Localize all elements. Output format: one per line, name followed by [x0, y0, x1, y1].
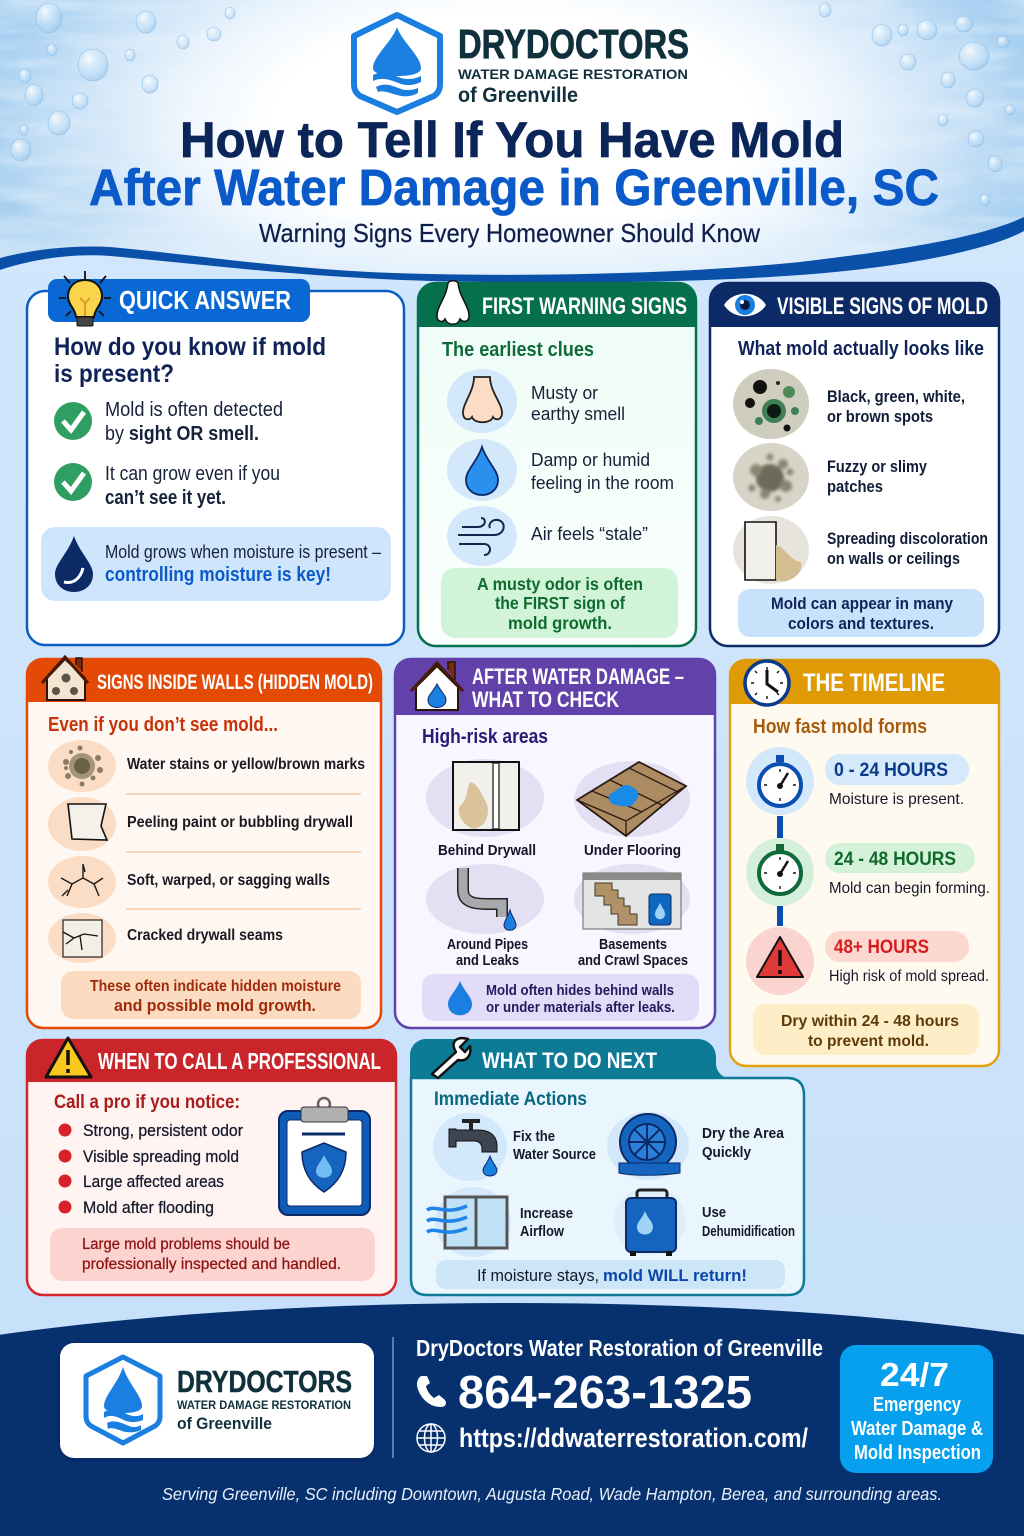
question heading: is present? — [54, 360, 174, 388]
checklist item: can grow unseen — [54, 463, 280, 509]
hidden moisture callout: These often indicate hidden moisture — [90, 978, 341, 995]
decorative wave — [0, 217, 1024, 283]
step: 48 plus hours: High risk of mold spread. — [829, 968, 989, 985]
area: around pipes: and Leaks — [456, 953, 519, 969]
bullet list: Strong, persistent odor — [83, 1122, 243, 1140]
checklist item: sight or smell: by sight OR smell. — [105, 423, 259, 445]
step: 0 to 24 hours: Moisture is present. — [829, 791, 964, 808]
bullet list: Mold after flooding — [83, 1199, 214, 1217]
panel: what to do next: WHAT TO DO NEXT — [482, 1048, 657, 1073]
item: damp feeling: feeling in the room — [531, 472, 674, 493]
title: How to Tell If You Have Mold — [180, 112, 844, 168]
footer logo card: of Greenville — [177, 1414, 272, 1433]
panel: quick answer: QUICK ANSWER — [119, 285, 291, 315]
item: spreading discoloration: on walls or ceilings — [827, 550, 960, 568]
visible signs header — [709, 282, 1000, 327]
header water background — [0, 0, 1024, 285]
item: damp feeling — [447, 439, 674, 501]
footer — [0, 1303, 1024, 1536]
logo: DryDoctors header — [354, 15, 689, 112]
professional inspection callout: professionally inspected and handled. — [82, 1256, 341, 1273]
panel: the timeline — [729, 659, 1000, 1066]
musty odor callout: A musty odor is often — [477, 574, 643, 594]
panel: after water damage — [394, 658, 716, 1028]
professional inspection callout — [50, 1228, 375, 1281]
24/7 badge: 24/7 — [880, 1356, 949, 1393]
professional inspection callout: Large mold problems should be — [82, 1236, 290, 1253]
step: 0 to 24 hours: 0 - 24 HOURS — [834, 760, 948, 781]
checklist item: can grow unseen: It can grow even if you — [105, 463, 280, 485]
action: increase airflow: Airflow — [520, 1224, 565, 1240]
footer logo card: DRYDOCTORS — [177, 1364, 352, 1399]
panel: when to call a professional: Call a pro if you notice: — [54, 1092, 240, 1113]
icon: house with drop — [411, 662, 463, 710]
dry within callout: to prevent mold. — [808, 1033, 929, 1050]
area: basements — [574, 864, 690, 969]
colors and textures callout: colors and textures. — [788, 615, 934, 633]
step: 0 to 24 hours — [746, 747, 969, 815]
panel: what to do next: Immediate Actions — [434, 1089, 587, 1110]
icon: light bulb — [59, 271, 111, 326]
step: 24 to 48 hours: Mold can begin forming. — [829, 880, 990, 897]
mold hides callout: or under materials after leaks. — [486, 1000, 675, 1016]
action: dehumidification: Use — [702, 1205, 726, 1221]
area: under flooring — [574, 761, 690, 859]
item: cracked seams: Cracked drywall seams — [127, 927, 283, 944]
item: warped walls — [48, 856, 330, 908]
action: dry the area: Dry the Area — [702, 1126, 785, 1142]
item: musty smell — [447, 369, 625, 433]
service area line: Serving Greenville, SC including Downtown, Augusta Road, Wade Hampton, Berea, and surrounding areas. — [162, 1484, 942, 1504]
item: stale air: Air feels “stale” — [531, 523, 648, 544]
dry within callout — [753, 1004, 979, 1055]
area: basements: Basements — [599, 937, 667, 953]
panel: what to do next — [410, 1038, 804, 1295]
question heading: How do you know if mold — [54, 333, 326, 361]
icon: clock — [745, 661, 789, 705]
24/7 badge: Emergency — [873, 1394, 962, 1416]
mold will return callout: If moisture stays, — [477, 1266, 599, 1285]
24/7 badge: Mold Inspection — [854, 1442, 981, 1464]
action: fix water source: Fix the — [513, 1129, 555, 1145]
item: colored spots: or brown spots — [827, 408, 933, 426]
item: water stains — [48, 740, 365, 792]
area: around pipes — [426, 864, 544, 969]
bullet list — [58, 1122, 243, 1217]
panel: after water damage: High-risk areas — [422, 726, 548, 748]
panel: signs inside walls: SIGNS INSIDE WALLS (HIDDEN MOLD) — [97, 671, 373, 694]
panel: signs inside walls — [26, 657, 382, 1028]
musty odor callout: mold growth. — [508, 613, 612, 633]
step: 48 plus hours: 48+ HOURS — [834, 937, 929, 958]
icon: white nose — [437, 281, 469, 324]
item: cracked seams — [48, 913, 283, 963]
action: increase airflow: Increase — [520, 1206, 573, 1222]
area: behind drywall — [426, 759, 544, 859]
panel: when to call a professional: WHEN TO CALL A PROFESSIONAL — [98, 1048, 381, 1074]
hidden moisture callout — [61, 971, 361, 1019]
item: fuzzy patches: Fuzzy or slimy — [827, 458, 928, 476]
subtitle: Warning Signs Every Homeowner Should Know — [259, 218, 760, 248]
panel: after water damage: WHAT TO CHECK — [472, 687, 620, 712]
panel: visible signs of mold: What mold actually looks like — [738, 338, 984, 360]
icon: moldy house — [42, 657, 88, 700]
action: fix water source: Water Source — [513, 1147, 596, 1163]
action: dry the area: Quickly — [702, 1145, 751, 1161]
area: basements: and Crawl Spaces — [578, 953, 688, 969]
panel: first warning signs: FIRST WARNING SIGNS — [482, 293, 687, 320]
professional header — [26, 1039, 397, 1082]
company name: DryDoctors Water Restoration of Greenville — [416, 1335, 823, 1361]
dry within callout: Dry within 24 - 48 hours — [781, 1013, 959, 1030]
action: increase airflow — [427, 1187, 573, 1257]
footer logo card: WATER DAMAGE RESTORATION — [177, 1400, 351, 1412]
action: dehumidification: Dehumidification — [702, 1224, 795, 1240]
panel: first warning signs — [417, 281, 697, 646]
what to do next header — [410, 1039, 730, 1082]
timeline header — [729, 659, 1000, 704]
hidden moisture callout: and possible mold growth. — [114, 997, 316, 1015]
checklist item: sight or smell: Mold is often detected — [105, 399, 283, 421]
item: damp feeling: Damp or humid — [531, 449, 650, 470]
step: 24 to 48 hours: 24 - 48 HOURS — [834, 849, 956, 870]
item: peeling paint — [48, 797, 353, 851]
mold hides callout: Mold often hides behind walls — [486, 983, 674, 999]
panel: after water damage: AFTER WATER DAMAGE – — [472, 664, 684, 689]
website: https://ddwaterrestoration.com/ — [459, 1423, 808, 1453]
step: 48 plus hours — [746, 927, 989, 995]
signs inside walls header — [26, 658, 382, 702]
item: spreading discoloration: Spreading discoloration — [827, 530, 988, 548]
title: After Water Damage in Greenville, SC — [89, 159, 939, 216]
colors and textures callout: Mold can appear in many — [771, 595, 954, 613]
after water damage header — [394, 658, 716, 715]
item: colored spots: Black, green, white, — [827, 388, 965, 406]
item: peeling paint: Peeling paint or bubbling drywall — [127, 814, 353, 831]
action: fix water source — [433, 1113, 596, 1181]
panel: signs inside walls: Even if you don’t see mold... — [48, 714, 278, 736]
item: warped walls: Soft, warped, or sagging walls — [127, 872, 330, 889]
area: under flooring: Under Flooring — [584, 843, 681, 859]
icon: clipboard with shield — [279, 1098, 370, 1215]
area: around pipes: Around Pipes — [447, 937, 528, 953]
mold will return callout: mold WILL return! — [603, 1266, 747, 1285]
action: dry the area — [607, 1112, 785, 1180]
question heading — [54, 333, 326, 388]
musty odor callout: the FIRST sign of — [495, 593, 625, 613]
moisture callout: controlling moisture is key! — [105, 564, 331, 586]
panel: the timeline: How fast mold forms — [753, 716, 927, 738]
item: musty smell: Musty or — [531, 382, 598, 403]
checklist item: can grow unseen: can’t see it yet. — [105, 487, 226, 509]
panel: when to call a professional — [26, 1038, 397, 1295]
moisture callout: Mold grows when moisture is present – — [105, 542, 381, 562]
item: fuzzy patches: patches — [827, 478, 883, 496]
checklist item: sight or smell — [54, 399, 283, 445]
mold hides callout — [422, 974, 699, 1021]
logo: DryDoctors header: of Greenville — [458, 84, 578, 107]
item: fuzzy patches — [733, 443, 928, 511]
action: dehumidification — [614, 1187, 795, 1256]
panel: the timeline: THE TIMELINE — [803, 669, 945, 697]
step: 24 to 48 hours — [746, 838, 990, 906]
colors and textures callout — [738, 589, 984, 637]
item: musty smell: earthy smell — [531, 403, 625, 424]
item: stale air — [447, 506, 648, 566]
bullet list: Visible spreading mold — [83, 1148, 239, 1166]
icon: warning triangle — [46, 1038, 91, 1077]
quick answer header tab — [48, 279, 310, 322]
footer logo card — [60, 1343, 374, 1458]
panel: first warning signs: The earliest clues — [442, 339, 594, 361]
24/7 badge: Water Damage & — [851, 1418, 983, 1440]
first warning signs header — [417, 282, 697, 327]
logo: DryDoctors header: WATER DAMAGE RESTORATION — [458, 66, 688, 82]
item: spreading discoloration — [733, 516, 988, 584]
item: colored spots — [733, 369, 965, 439]
panel: visible signs of mold — [709, 282, 1000, 646]
moisture callout — [41, 527, 391, 601]
panel: quick answer — [27, 271, 404, 645]
phone number: 864-263-1325 — [458, 1366, 752, 1418]
logo: DryDoctors header: DRYDOCTORS — [458, 21, 689, 67]
icon: eye — [724, 294, 766, 316]
mold will return callout — [436, 1260, 785, 1289]
icon: wrench — [432, 1038, 470, 1078]
area: behind drywall: Behind Drywall — [438, 843, 536, 859]
title — [89, 112, 939, 216]
24/7 badge — [840, 1345, 993, 1473]
musty odor callout — [441, 568, 678, 638]
bullet list: Large affected areas — [83, 1173, 224, 1191]
item: water stains: Water stains or yellow/brown marks — [127, 756, 365, 773]
